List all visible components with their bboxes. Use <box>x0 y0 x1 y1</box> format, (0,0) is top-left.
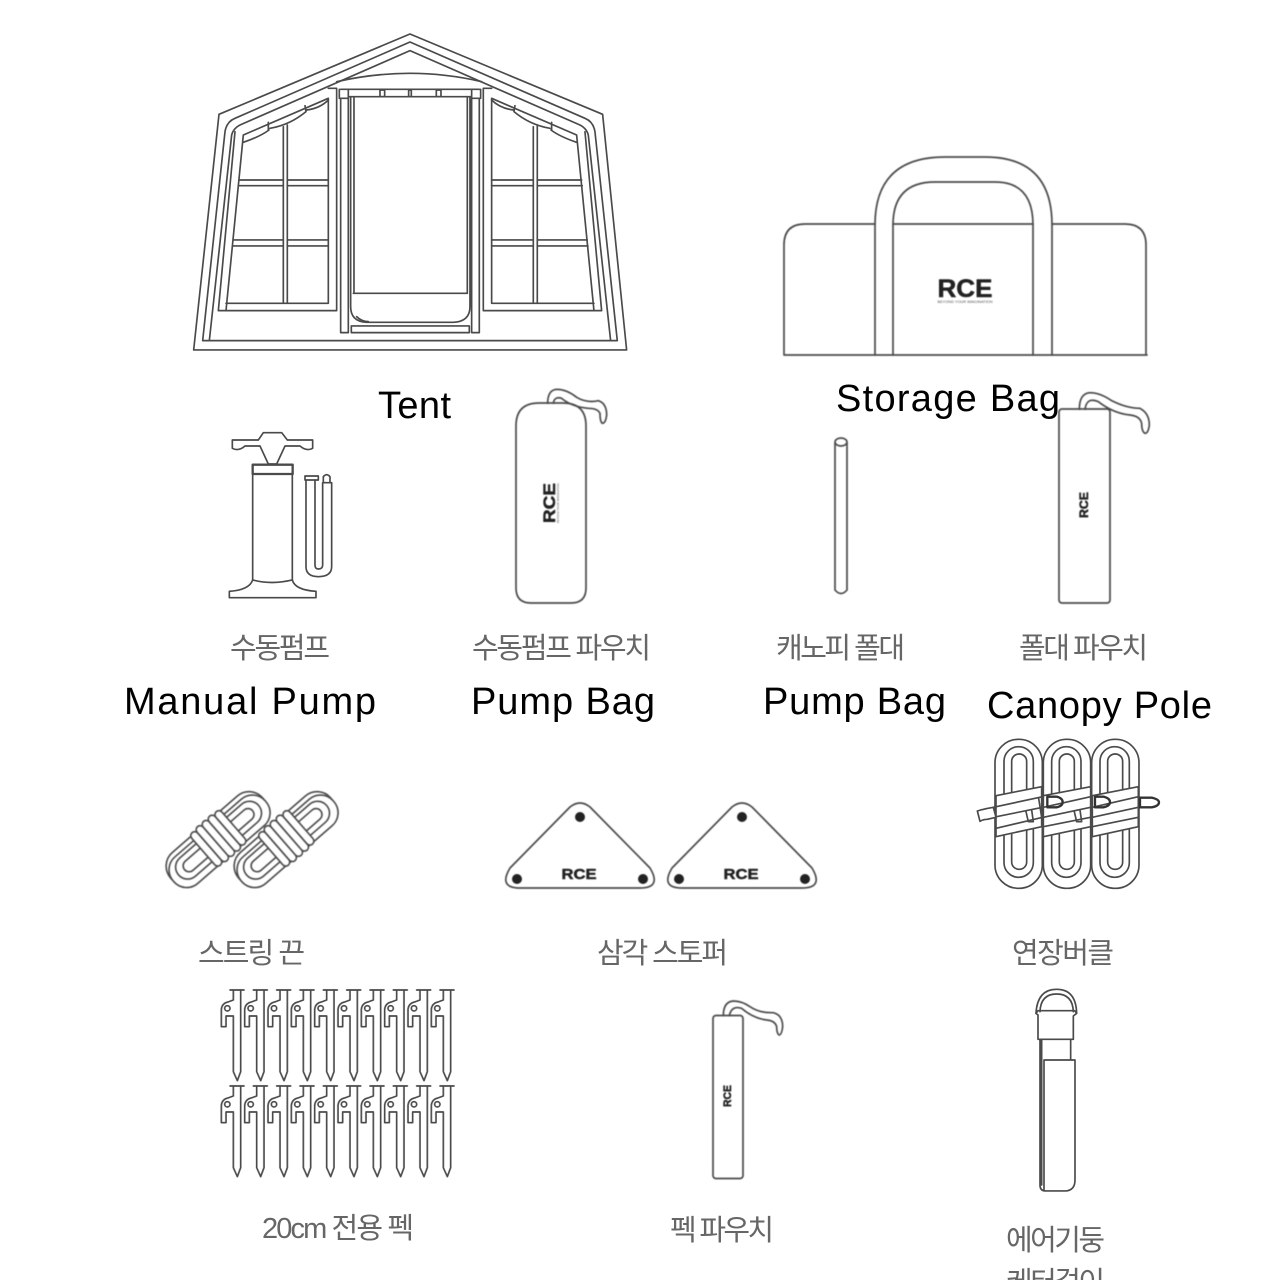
logo: RCE on pump bag: BEYOND YOUR IMAGINATION <box>556 483 560 523</box>
label: Canopy Pole: Canopy Pole <box>987 685 1212 727</box>
label: Tent: Tent <box>378 385 451 427</box>
label: 삼각 스토퍼: 삼각 스토퍼 <box>597 938 728 970</box>
label: 연장버클: 연장버클 <box>1012 938 1114 970</box>
label: 수동펌프: 수동펌프 <box>230 633 330 665</box>
label: Pump Bag (pole): Pump Bag <box>763 681 946 723</box>
logo: RCE on storage bag: RCE <box>938 275 992 303</box>
icon: manual pump <box>229 433 332 598</box>
label: 수동펌프 파우치: 수동펌프 파우치 <box>472 633 651 665</box>
label: 폴대 파우치: 폴대 파우치 <box>1019 632 1148 665</box>
icon: peg pouch <box>713 1001 783 1178</box>
logo: RCE on storage bag: BEYOND YOUR IMAGINATION <box>938 299 993 304</box>
icon: pole bag <box>1059 393 1149 603</box>
icon: triangle stoppers: RCE <box>562 866 596 883</box>
rope bundle left <box>157 782 278 896</box>
logo: RCE on peg pouch: RCE <box>722 1085 734 1107</box>
logo: RCE on pump bag: RCE <box>540 483 559 523</box>
icon: canopy pole <box>835 438 847 594</box>
icon: tent <box>194 34 627 350</box>
icon: air pillar <box>1036 989 1077 1191</box>
icon: storage bag <box>784 157 1147 355</box>
icon: triangle stoppers <box>506 803 816 888</box>
label: 스트링 끈: 스트링 끈 <box>198 938 305 970</box>
label: 에어기둥: 에어기둥 <box>1006 1225 1105 1257</box>
label: Pump Bag (pump): Pump Bag <box>471 681 655 723</box>
icon: string ropes <box>157 782 346 896</box>
label: 펙 파우치: 펙 파우치 <box>670 1214 774 1247</box>
icon: triangle stoppers: RCE <box>724 866 758 883</box>
logo: RCE on pole bag: RCE <box>1077 492 1091 518</box>
label: Storage Bag: Storage Bag <box>836 378 1060 420</box>
label: 캐노피 폴대: 캐노피 폴대 <box>776 632 905 665</box>
label: Manual Pump: Manual Pump <box>124 681 376 723</box>
rope bundle right <box>225 782 346 896</box>
icon: pump bag <box>516 389 607 603</box>
icon: extension buckles <box>977 739 1159 888</box>
label: 20cm 전용 펙: 20cm 전용 펙 <box>262 1212 414 1245</box>
